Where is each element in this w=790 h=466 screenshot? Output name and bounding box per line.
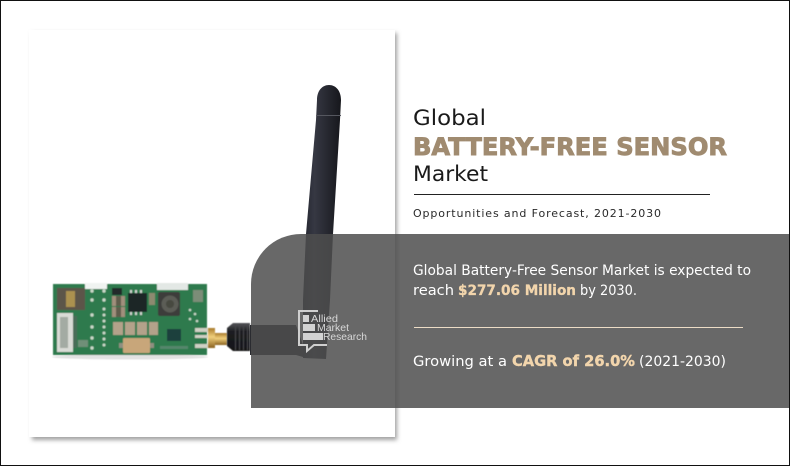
- knurled black nut: [227, 323, 250, 351]
- statement: market value: [413, 263, 751, 299]
- grey translucent information panel: [251, 234, 790, 408]
- title divider: [414, 194, 710, 195]
- circuit board: [52, 283, 208, 360]
- statement: market value: Global Battery-Free Sensor Market is expected to: [413, 263, 751, 279]
- product photo: battery-free sensor board with antenna: [52, 85, 341, 360]
- title: Global: Global: [413, 106, 486, 130]
- antenna elbow: [250, 325, 303, 357]
- icon: Allied Market Research logo: Allied: [311, 313, 338, 325]
- statement: market value: $277.06 Million: [458, 283, 576, 299]
- gold SMA connector: [208, 328, 227, 348]
- icon: Allied Market Research logo: [299, 311, 367, 351]
- statement: CAGR: Growing at a: [413, 354, 507, 370]
- statement: CAGR: CAGR of 26.0%: [512, 352, 635, 370]
- subtitle: forecast period: Opportunities and Forecast, 2021-2030: [413, 207, 661, 220]
- icon: Allied Market Research logo: Research: [323, 331, 367, 343]
- antenna whip: [303, 85, 341, 359]
- statement: CAGR: (2021-2030): [639, 354, 726, 370]
- title: Battery-Free Sensor: BATTERY-FREE SENSOR: [413, 133, 727, 161]
- panel divider: [414, 327, 743, 328]
- statement: CAGR: [413, 352, 726, 370]
- title: Market: Market: [413, 162, 488, 186]
- statement: market value: reach: [413, 283, 454, 299]
- statement: market value: by 2030.: [580, 283, 637, 299]
- icon: Allied Market Research logo: Market: [317, 322, 349, 334]
- photo card with drop shadow: [29, 30, 397, 440]
